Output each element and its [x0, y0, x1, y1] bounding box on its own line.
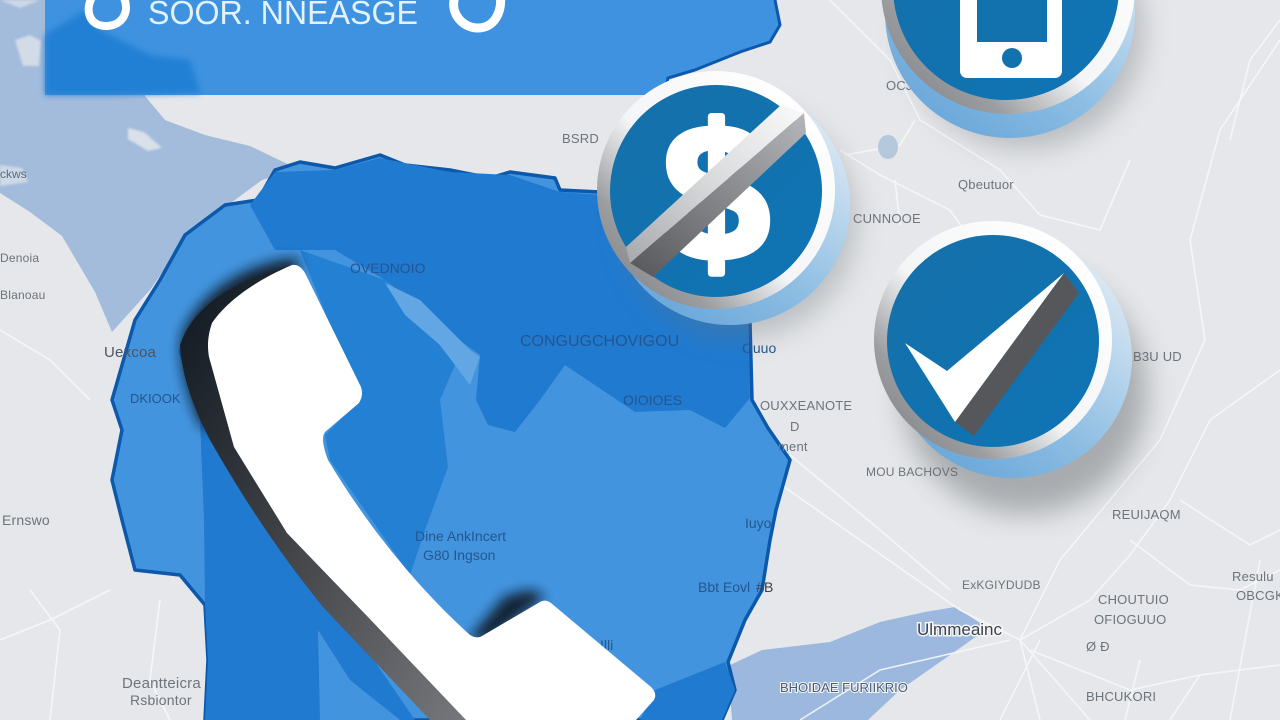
water: lake at lower right: [728, 607, 988, 720]
banner left ring icon: [89, 0, 126, 26]
labels on water: [0, 167, 1003, 695]
labels on land: Ernswo: [2, 512, 50, 528]
banner texture: [45, 10, 200, 95]
labels on state: OIOIOES: [623, 392, 682, 408]
labels on land: ExKGIYDUDB: [962, 578, 1041, 592]
badge base: [885, 0, 1135, 138]
labels on land: REUIJAQM: [1112, 507, 1181, 522]
slash bar: [626, 105, 806, 277]
labels on water: ckws: [0, 167, 27, 181]
labels on land: OCJ: [886, 78, 913, 93]
icon: telephone handset: [180, 258, 655, 720]
badge base: [610, 85, 850, 325]
check mark: [905, 273, 1064, 422]
labels on land: MOU BACHOVS: [866, 465, 958, 479]
labels on state: Ouuo: [742, 340, 776, 356]
icon: check mark badge: [874, 221, 1147, 514]
labels on land: Resulu: [1232, 569, 1274, 584]
land smudge by phone badge: [878, 135, 898, 159]
labels on land: B3U UD: [1133, 349, 1182, 364]
labels on land: CHOUTUIO: [1098, 592, 1169, 607]
coast islands in the sea: [0, 0, 162, 186]
labels on state: OVEDNOIO: [350, 260, 426, 276]
handset dark rim: [180, 265, 475, 720]
labels on land: OFIOGUUO: [1094, 612, 1166, 627]
top banner: [45, 0, 780, 95]
badge face: [893, 0, 1119, 100]
dollar sign: $: [663, 85, 769, 300]
badge ground shadow: [624, 106, 856, 338]
labels on land: Qbeutuor: [958, 177, 1014, 192]
darker upper state area: [250, 158, 750, 432]
badge ring: [597, 71, 835, 309]
labels on land: OUXXEANOTE: [760, 398, 852, 413]
banner edge: [664, 0, 780, 95]
labels on land: BSRD: [562, 131, 599, 146]
south dark lobe: [640, 662, 735, 720]
state base fill: [112, 155, 790, 720]
smartphone body: [960, 0, 1062, 78]
water: upper left sea: [0, 0, 300, 332]
labels on land: Uexcoa: [104, 344, 157, 361]
labels on state: Iuyo: [745, 515, 772, 531]
badge ground shadow: [907, 0, 1143, 148]
banner right ring icon: [454, 0, 501, 28]
smartphone button: [1002, 48, 1022, 68]
badge base: [892, 238, 1132, 478]
icon: crossed-out dollar badge: [597, 71, 856, 338]
labels on state: G80 Ingson: [423, 547, 495, 563]
handset soft shadow: [181, 258, 545, 640]
state region on the map: [112, 155, 790, 720]
labels on land: CUNNOOE: [853, 211, 921, 226]
labels on land: Blanoau: [0, 288, 45, 302]
badge ring: [874, 221, 1112, 459]
darker inland strip beside handset: [300, 250, 455, 575]
labels on water: Ulmmeainc: [917, 620, 1003, 639]
south-west light patch: [318, 630, 400, 720]
badge ground shadow: [903, 270, 1147, 514]
light river band: [385, 283, 480, 385]
smartphone screen: [977, 0, 1047, 42]
labels on land: Ø Ð: [1086, 639, 1110, 654]
labels on state: Illi: [600, 637, 613, 653]
check shadow: [955, 273, 1079, 436]
labels on land: #B: [756, 579, 774, 595]
labels on land: D: [790, 419, 800, 434]
labels on water: BHOIDAE FURIIKRIO: [780, 680, 908, 695]
labels on state: CONGUGCHOVIGOU: [520, 333, 679, 350]
labels on land: Rsbiontor: [130, 692, 192, 708]
badge ring: [881, 0, 1135, 114]
badge face: [887, 235, 1099, 447]
labels on land: ment: [778, 439, 808, 454]
labels on state: [130, 260, 776, 653]
badge face: [610, 85, 822, 297]
labels on state: Bbt Eovl: [698, 579, 750, 595]
labels on state: DKIOOK: [130, 391, 181, 406]
labels on state: Dine AnkIncert: [415, 528, 506, 544]
darker western state strip: [178, 320, 415, 720]
handset body: [208, 265, 655, 720]
labels on land: Deantteicra: [122, 675, 201, 692]
labels on land: BHCUKORI: [1086, 689, 1156, 704]
labels on land: Denoia: [0, 251, 39, 265]
icon: phone badge: [881, 0, 1143, 148]
